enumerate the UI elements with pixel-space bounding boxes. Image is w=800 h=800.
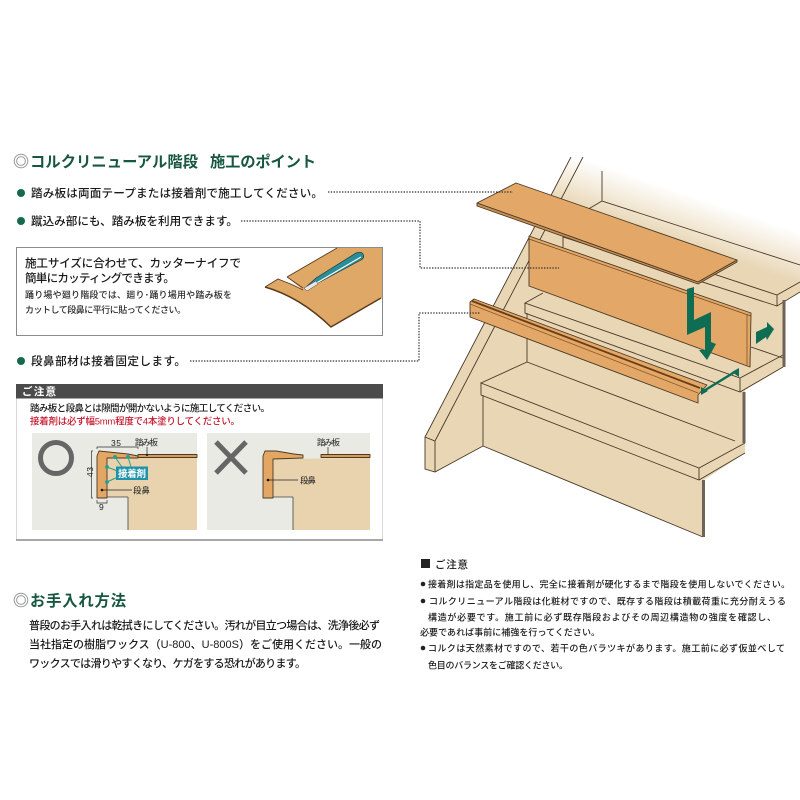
label: nosing: 段鼻 — [133, 486, 150, 496]
title: construction points — [14, 153, 316, 171]
leader: riser board — [241, 221, 559, 268]
dimensions — [85, 438, 158, 512]
text: notes: コルクリニューアル階段は化粧材ですので、既存する階段は積載荷重に充分耐えうる — [429, 596, 786, 606]
text: care method body: 当社指定の樹脂ワックス（U-800、U-800S）をご使用ください。一般の — [29, 637, 382, 651]
text: care method body — [29, 618, 382, 670]
bullet: nosing: 段鼻部材は接着固定します。 — [31, 354, 186, 368]
bullet: riser board: 蹴込み部にも、踏み板を利用できます。 — [31, 214, 238, 228]
caution header bar: ご注意 — [22, 385, 56, 398]
arrow: zigzag green — [687, 287, 716, 360]
cutting tip text: 施工サイズに合わせて、カッターナイフで — [25, 256, 241, 270]
cutting tip text: 踊り場や廻り階段では、廻り･踊り場用や踏み板を — [25, 289, 232, 300]
panel: caution — [16, 384, 383, 540]
tread section — [138, 454, 197, 458]
cutting tip text: 簡単にカッティングできます。 — [25, 271, 175, 285]
nosing section — [263, 451, 303, 498]
cutting tip text — [25, 256, 241, 315]
nosing member — [470, 299, 707, 403]
icon: cork sheet and cutter knife — [265, 248, 382, 327]
text: notes: 構造が必要です。施工前に必ず既存階段およびその周辺構造物の強度を確認し、 — [428, 612, 776, 622]
title: construction points: コルクリニューアル階段 — [30, 153, 199, 171]
label: tread — [317, 438, 340, 454]
label: nosing — [101, 486, 150, 496]
arrow: double-headed green — [701, 368, 739, 395]
dimensions: 43 — [85, 467, 95, 477]
cutting tip text: カットして段鼻に平行に貼ってください。 — [25, 304, 186, 315]
third step — [481, 362, 745, 537]
risers — [782, 300, 786, 367]
callout: adhesive: 接着剤 — [118, 468, 146, 480]
stringer lines — [425, 157, 583, 472]
panel: cutting tip — [16, 248, 382, 336]
text: notes: 色目のバランスをご確認ください。 — [428, 660, 568, 670]
second step — [525, 293, 783, 392]
bullet: tread board: 踏み板は両面テープまたは接着剤で施工してください。 — [31, 186, 323, 200]
label: tread: 踏み板 — [317, 438, 340, 448]
text: notes: 接着剤は指定品を使用し、完全に接着剤が硬化するまで階段を使用しないでください。 — [428, 578, 790, 590]
text: notes: コルクは天然素材ですので、若干の色バラツキがあります。施工前に必ず仮並べして — [428, 642, 785, 654]
tread section — [321, 454, 370, 458]
diagram: incorrect installation — [207, 433, 370, 530]
nosing section — [97, 451, 138, 498]
text: care method body: ワックスでは滑りやすくなり、ケガをする恐れがあります。 — [29, 656, 306, 670]
heading: care method: お手入れ方法 — [30, 592, 127, 610]
caution text: 踏み板と段鼻とは隙間が開かないように施工してください。 — [30, 402, 270, 414]
dimensions: 踏み板 — [135, 438, 158, 448]
riser board — [529, 236, 751, 367]
tread board — [477, 183, 737, 284]
callout: adhesive — [105, 455, 148, 484]
heading: notes: ご注意 — [435, 558, 468, 571]
icon: cross mark — [216, 442, 246, 473]
top step — [563, 171, 800, 306]
dimensions: 9 — [99, 502, 104, 512]
stair silhouette — [425, 157, 800, 537]
text: notes — [420, 578, 790, 670]
staircase illustration — [425, 157, 800, 537]
dimensions: 35 — [111, 438, 121, 448]
label: nosing — [267, 476, 316, 486]
label: nosing: 段鼻 — [300, 476, 316, 486]
icon: circle mark — [40, 442, 72, 474]
arrow: right green — [756, 322, 774, 344]
text: care method body: 普段のお手入れは乾拭きにしてください。汚れが目立つ場合は、洗浄後必ず — [29, 618, 380, 632]
leader: tread board — [328, 191, 513, 193]
caution text: 接着剤は必ず幅5mm程度で4本塗りしてください。 — [30, 416, 240, 428]
caution header bar — [16, 384, 383, 398]
caution text — [30, 402, 270, 428]
title: construction points: 施工のポイント — [210, 153, 316, 171]
diagram: correct installation — [32, 433, 197, 530]
heading: notes — [421, 558, 468, 571]
leader: nosing — [190, 313, 480, 361]
text: notes: 必要であれば事前に補強を行ってください。 — [420, 626, 600, 638]
